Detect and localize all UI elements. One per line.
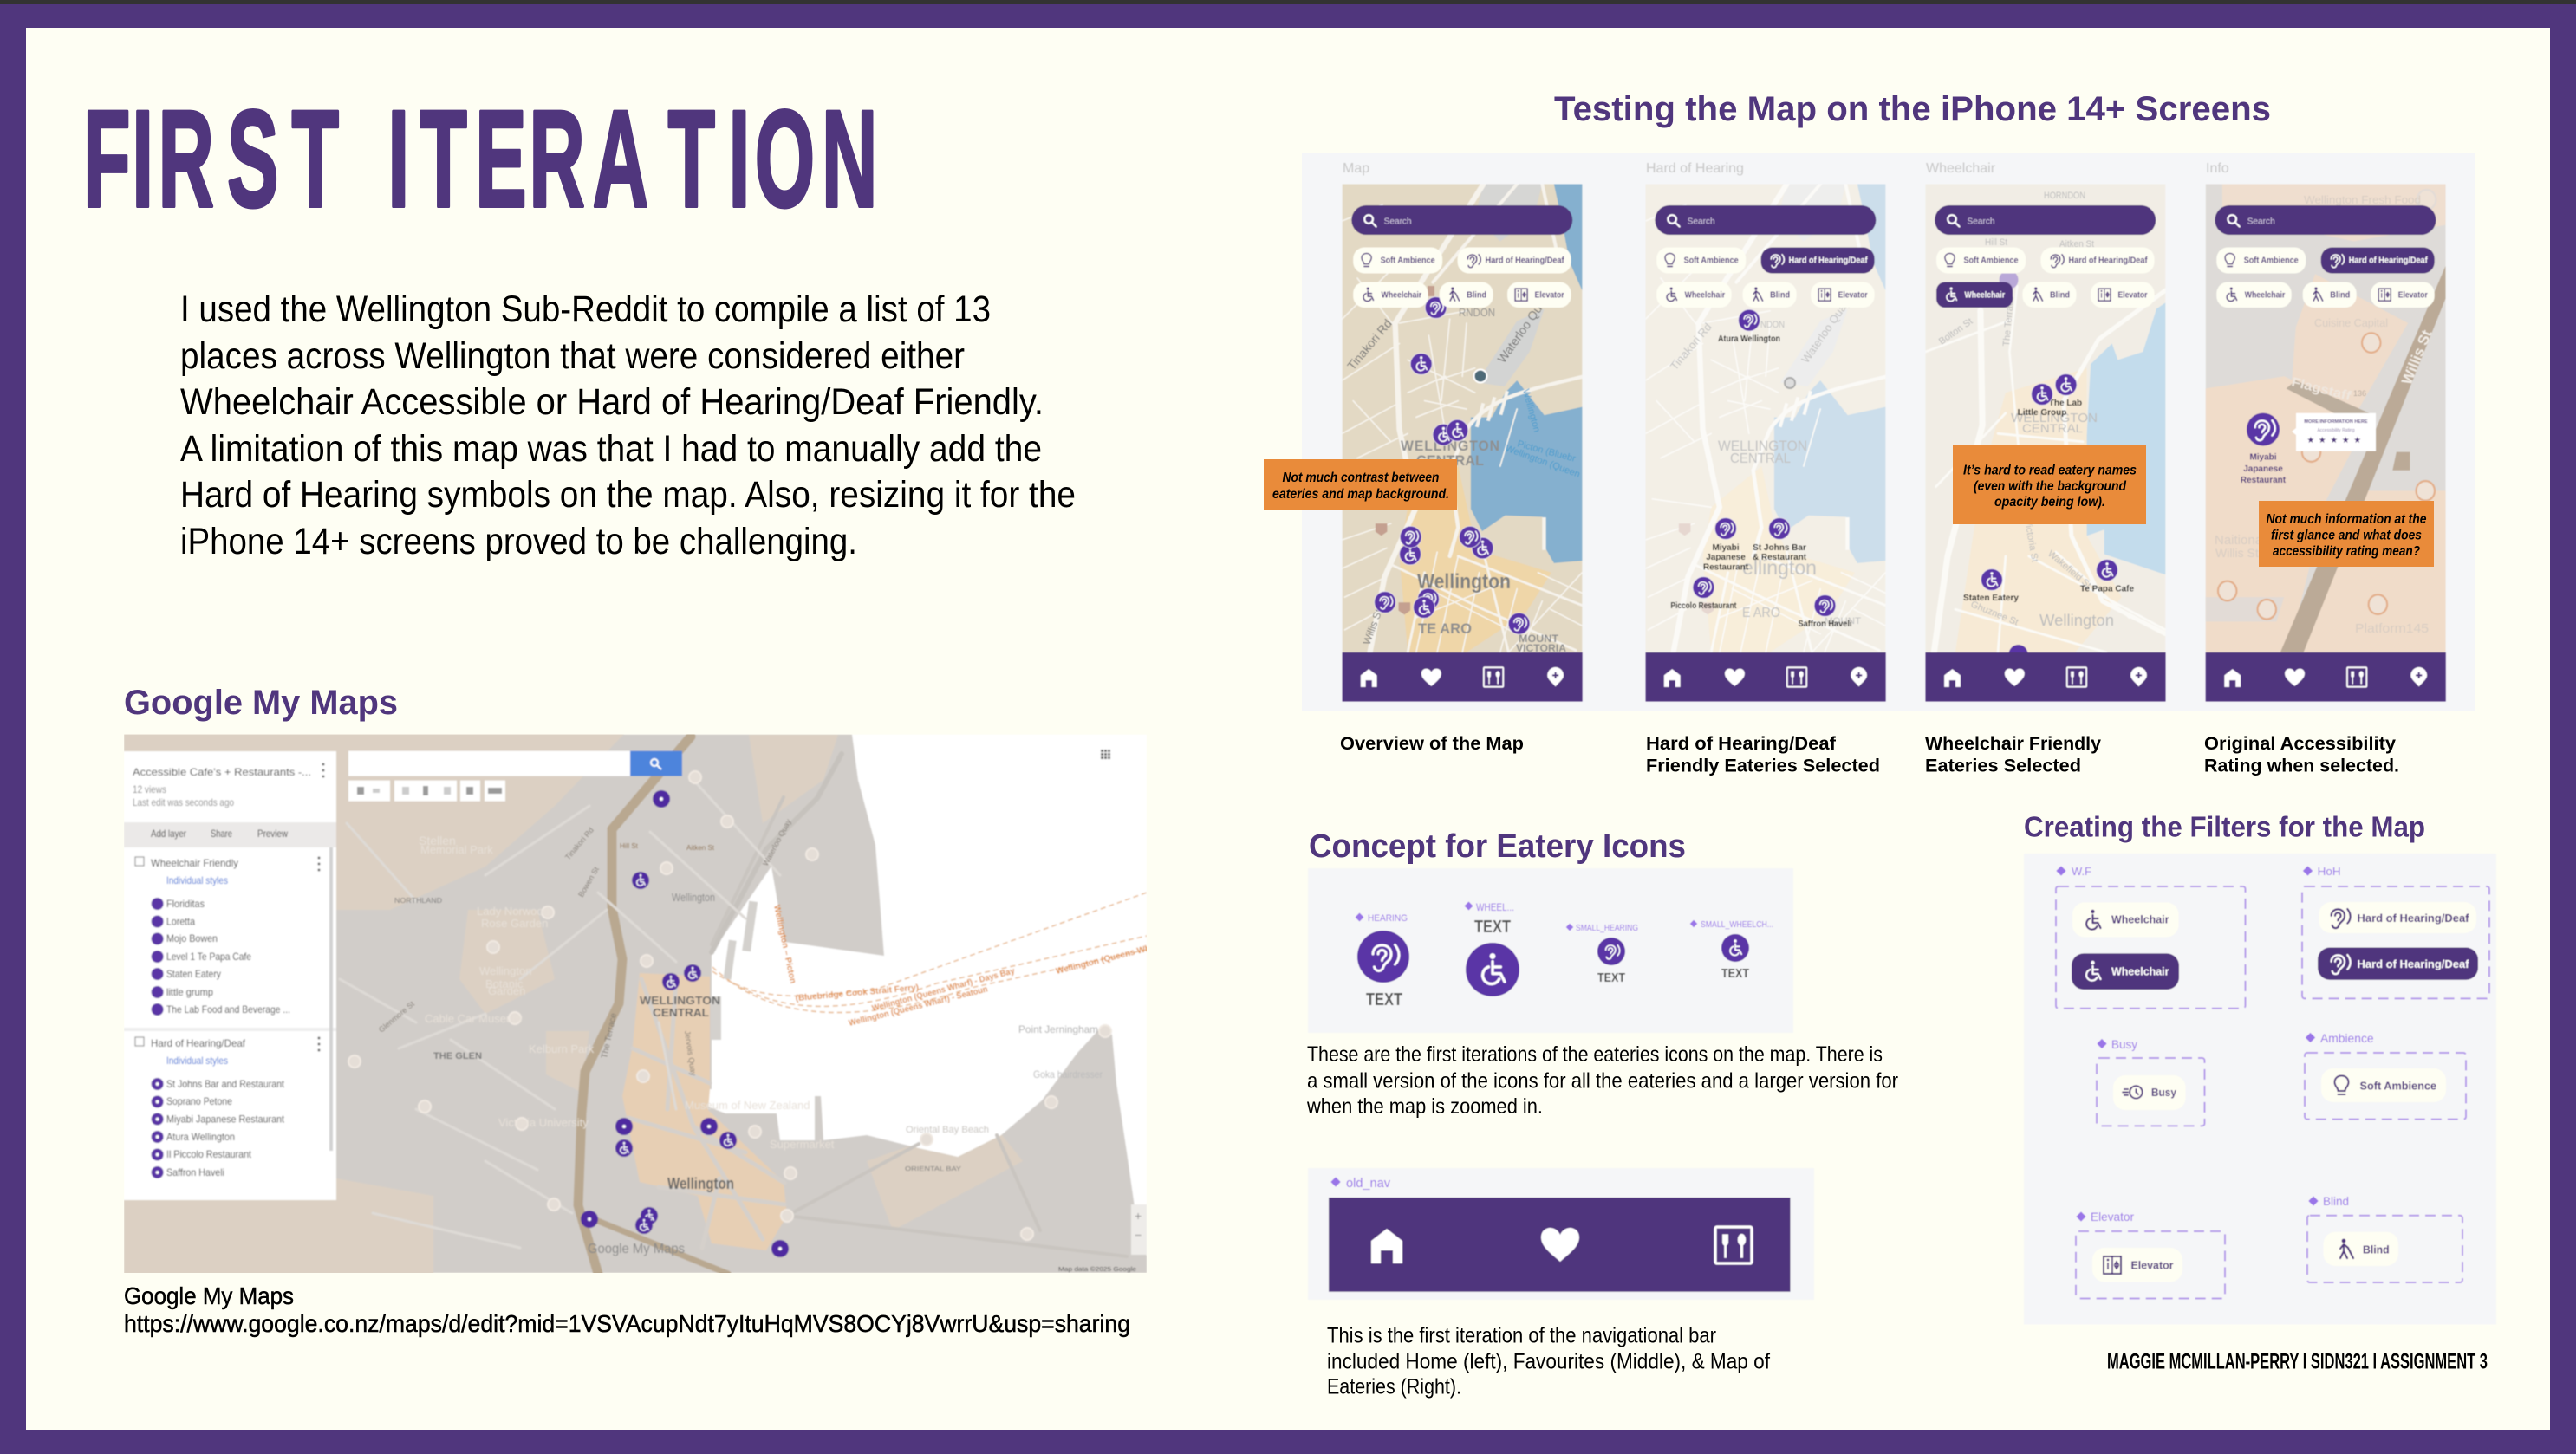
map labels: Wellington	[479, 964, 531, 977]
phone 3 map: Bolton St	[1937, 316, 1974, 347]
phone 4 map: Wellington Fresh Food	[2304, 193, 2421, 206]
navigation bar description: included Home (left), Favourites (Middle), & Map of	[1327, 1350, 1770, 1374]
phone 2 map: MOUNT	[1825, 616, 1861, 626]
panel: map filters	[2024, 854, 2496, 1324]
phone captions: Hard of Hearing/Deaf	[1646, 734, 1837, 754]
map layers sidebar: Soprano Petone	[166, 1095, 232, 1107]
map layers sidebar: Atura Wellington	[166, 1131, 235, 1143]
map caption and link	[124, 1282, 1130, 1337]
heading: Concept for Eatery Icons: Concept for Eatery Icons	[1309, 828, 1686, 865]
phone 2 map: WELLINGTON	[1718, 438, 1807, 454]
phone 4 map: Flagstaff	[2290, 374, 2353, 404]
accessibility rating card: MORE INFORMATION HERE	[2304, 419, 2368, 425]
phone 2 UI chrome: Blind	[1770, 291, 1790, 300]
phone 3 UI chrome: Blind	[2050, 291, 2070, 300]
phone 2 eatery pins and names: Saffron Haveli	[1798, 620, 1852, 629]
phone 4: original accessibility rating	[2206, 184, 2446, 702]
map layers sidebar: The Lab Food and Beverage ...	[166, 1003, 290, 1016]
map labels: Bowen St	[576, 865, 601, 899]
phone 1 map: WELLINGTON	[1401, 438, 1500, 454]
phone 2 UI chrome	[1646, 205, 1886, 702]
map labels: Wellington	[672, 891, 715, 904]
phone 1 map: Waterloo Quay	[1494, 291, 1552, 366]
phone 2 map	[1646, 184, 1888, 653]
callout: eatery names: opacity being low).	[1994, 495, 2105, 510]
filter: wheelchair	[2056, 865, 2245, 1009]
callout: contrast	[1264, 459, 1457, 510]
callout: eatery names: It’s hard to read eatery names	[1963, 463, 2137, 478]
map layers sidebar: Wheelchair Friendly	[151, 857, 238, 869]
phone 3 UI chrome: Soft Ambience	[1964, 256, 2019, 265]
filter: wheelchair: Wheelchair	[2111, 965, 2169, 977]
panel: eatery icons	[1308, 868, 1793, 1033]
phone 4 selected eatery: Japanese	[2243, 464, 2283, 474]
filter: wheelchair: Wheelchair	[2111, 913, 2169, 925]
panel: old navigation bar	[1308, 1168, 1814, 1300]
map grid menu	[1101, 750, 1110, 759]
map layers sidebar: Preview	[257, 828, 288, 840]
phone captions: Friendly Eateries Selected	[1646, 756, 1880, 776]
filter: ambience: Soft Ambience	[2359, 1080, 2436, 1092]
phone 4 map: Platform145	[2355, 621, 2429, 636]
phone 4 selected eatery	[2241, 413, 2287, 485]
map labels: ORIENTAL BAY	[905, 1166, 961, 1172]
icon: large hearing	[1356, 913, 1409, 1009]
filter: hard of hearing: Hard of Hearing/Deaf	[2358, 957, 2469, 970]
phone 2 UI chrome: Elevator	[1838, 291, 1868, 300]
phone 3: wheelchair selected	[1926, 184, 2165, 702]
filter: wheelchair: W.F	[2072, 865, 2091, 878]
map labels: Memorial Park	[420, 843, 493, 856]
phone 4 map: Naitional	[2215, 533, 2265, 548]
eatery icons description: These are the first iterations of the eateries icons on the map. There is	[1307, 1042, 1883, 1067]
phone 4 UI chrome: Soft Ambience	[2244, 256, 2299, 265]
map layers sidebar	[124, 751, 336, 1200]
map labels: Hill St	[620, 842, 639, 850]
phone 2 eatery pins and names	[1670, 309, 1852, 629]
phone frame labels	[1343, 161, 2229, 176]
eatery icons description: when the map is zoomed in.	[1306, 1094, 1543, 1119]
phone 4 UI chrome: Search	[2247, 217, 2275, 227]
phone 3 UI chrome: Elevator	[2118, 291, 2148, 300]
phone 2 eatery pins and names: Restaurant	[1703, 563, 1749, 572]
map labels: Google My Maps	[588, 1242, 685, 1256]
icon: large hearing: HEARING	[1368, 913, 1408, 924]
phone 4 selected eatery: Miyabi	[2249, 452, 2277, 463]
phone 1 map: Wellington	[1417, 570, 1511, 594]
phone 3 UI chrome: Wheelchair	[1964, 291, 2005, 300]
map search box and toolbar	[348, 751, 682, 802]
phone 1 UI chrome: Elevator	[1535, 291, 1564, 300]
phone 1: overview of the map	[1343, 184, 1584, 702]
phone 3 map: The Terrace	[2001, 295, 2016, 347]
phone 1 map: Willis St	[1361, 607, 1385, 646]
phone captions: Eateries Selected	[1925, 756, 2081, 776]
phone 2 map: Waterloo Quay	[1799, 296, 1852, 366]
phone 2 UI chrome: Soft Ambience	[1684, 256, 1739, 265]
intro paragraph	[180, 289, 1076, 562]
phone 2 eatery pins and names: Miyabi	[1712, 543, 1740, 553]
filter: elevator	[2076, 1210, 2225, 1298]
eatery icons description	[1306, 1042, 1898, 1119]
map layers sidebar: Accessible Cafe's + Restaurants -...	[133, 766, 311, 778]
phone 3 eatery pins and names: Te Papa Cafe	[2080, 584, 2134, 594]
phone 2 UI chrome: Wheelchair	[1685, 291, 1725, 300]
map caption and link: https://www.google.co.nz/maps/d/edit?mid=1VSVAcupNdt7yItuHqMVS8OCYj8VwrrU&usp=sharing	[124, 1310, 1130, 1337]
phone 4 map: Willis St	[2215, 546, 2259, 560]
phone 2 map: E ARO	[1742, 606, 1780, 620]
icon: small wheelchair: SMALL_WHEELCH...	[1701, 920, 1773, 930]
map labels: Stellen	[419, 834, 456, 847]
map labels: Oriental Bay Beach	[906, 1125, 989, 1135]
map labels: Museum of New Zealand	[685, 1099, 810, 1112]
icon: eateries	[1715, 1227, 1752, 1263]
heading: Testing the map: Testing the Map on the iPhone 14+ Screens	[1554, 90, 2271, 128]
phone 1 UI chrome: Search	[1384, 217, 1412, 227]
phone 1 map: VICTORIA	[1516, 642, 1566, 654]
filter: hard of hearing: HoH	[2318, 865, 2341, 878]
phone 2 UI chrome: Search	[1688, 217, 1715, 227]
map labels: Supermarket	[770, 1138, 835, 1151]
phone 2 eatery pins and names: St Johns Bar	[1753, 543, 1806, 553]
phone 3 UI chrome	[1926, 205, 2165, 702]
phone 3 eatery pins and names: Little Group	[2018, 408, 2066, 418]
icon: home	[1371, 1229, 1402, 1263]
map labels: Botanic	[485, 977, 524, 990]
callout: accessibility rating: Not much information at the	[2266, 512, 2427, 527]
phone 1 map: RNDON	[1459, 306, 1495, 319]
map labels: Jervois Quay	[683, 1030, 698, 1077]
phone 3 map: HORNDON	[2044, 191, 2085, 201]
phone frame labels: Map	[1343, 161, 1369, 176]
filter: elevator: Elevator	[2130, 1258, 2174, 1272]
map layers sidebar: Loretta	[166, 915, 195, 927]
map layers sidebar: Miyabi Japanese Restaurant	[166, 1113, 285, 1125]
map caption and link: Google My Maps	[124, 1282, 294, 1309]
phone 2 map: Tinakori Rd	[1668, 321, 1714, 373]
heading: Creating the Filters: Creating the Filters for the Map	[2024, 811, 2425, 842]
phone 1 map: Tinakori Rd	[1344, 316, 1395, 373]
map layers sidebar: Mojo Bowen	[166, 932, 218, 944]
phone 3 map: Wellington	[2039, 612, 2114, 629]
callout: eatery names: (even with the background	[1974, 479, 2127, 494]
phone 2 eatery pins and names: Atura Wellington	[1718, 334, 1780, 344]
phone 3 map: Hill St	[1985, 237, 2007, 248]
phone 3 eatery pins and names: The Lab	[2049, 399, 2082, 408]
phone 2 eatery pins and names: Japanese	[1706, 553, 1746, 562]
map labels: Victoria University	[498, 1116, 589, 1129]
icon: large hearing: TEXT	[1366, 990, 1402, 1009]
filter: hard of hearing: Hard of Hearing/Deaf	[2358, 912, 2469, 925]
phone 1 map: Wellington	[1520, 388, 1542, 433]
map labels: Rose Garden	[481, 917, 548, 930]
map layers sidebar: Il Piccolo Restaurant	[166, 1148, 252, 1160]
map markers	[581, 790, 789, 1257]
icon: large wheelchair	[1465, 901, 1519, 996]
map labels: Map data ©2025 Google	[1058, 1266, 1136, 1273]
map layers sidebar: Last edit was seconds ago	[133, 796, 234, 808]
phone 1 UI chrome: Wheelchair	[1382, 291, 1421, 300]
phone 4 UI chrome: Elevator	[2398, 291, 2428, 300]
map labels	[377, 817, 1136, 1273]
filter: busy: Busy	[2151, 1086, 2177, 1099]
top window strip	[0, 0, 2576, 4]
phone 1 UI chrome	[1343, 205, 1583, 702]
map labels: Wellington	[667, 1175, 734, 1192]
map labels: CENTRAL	[653, 1006, 709, 1019]
phone 4 UI chrome: Blind	[2330, 291, 2350, 300]
phone 4 UI chrome	[2206, 205, 2446, 702]
accessibility rating card: Accessibility Rating	[2317, 428, 2355, 433]
phone 3 map: Victoria St	[2022, 518, 2040, 563]
phone 1 UI chrome: Blind	[1467, 291, 1486, 300]
phone 2 eatery pins and names: Piccolo Restaurant	[1670, 601, 1737, 611]
filter: ambience	[2305, 1031, 2466, 1120]
filter: blind: Blind	[2323, 1194, 2349, 1208]
map layers sidebar: Staten Eatery	[166, 968, 221, 980]
icon: heart	[1541, 1228, 1579, 1262]
filter: busy	[2097, 1037, 2205, 1126]
icon: small wheelchair: TEXT	[1721, 966, 1749, 981]
filter: blind: Blind	[2363, 1243, 2390, 1256]
phone frame labels: Wheelchair	[1926, 161, 1996, 176]
map labels: Lady Norwood	[477, 905, 550, 918]
ferry route labels: Wellington – Picton	[771, 904, 797, 984]
ferry route labels: (Bluebridge Cook Strait Ferry)	[795, 983, 920, 1003]
map labels: The Terrace	[600, 1012, 619, 1060]
intro paragraph: iPhone 14+ screens proved to be challenging.	[180, 521, 857, 562]
map layers sidebar: 12 views	[133, 783, 166, 795]
phone 1 UI chrome: Soft Ambience	[1381, 256, 1435, 265]
phone 3 eatery pins and names: Staten Eatery	[1963, 594, 2019, 603]
phone 1 UI chrome: Hard of Hearing/Deaf	[1486, 256, 1564, 265]
filter: elevator: Elevator	[2091, 1210, 2134, 1224]
map labels: Point Jerningham	[1018, 1023, 1098, 1035]
map layers sidebar: little grump	[166, 986, 213, 998]
map layers sidebar: Individual styles	[166, 874, 228, 886]
ferry route labels	[771, 904, 1165, 1029]
phone 3 map: CENTRAL	[2022, 421, 2083, 435]
filter: hard of hearing	[2302, 865, 2489, 998]
map layers sidebar: Level 1 Te Papa Cafe	[166, 951, 251, 963]
phone 2 map: CENTRAL	[1730, 451, 1791, 466]
map layers sidebar: Individual styles	[166, 1055, 228, 1067]
phone captions: Wheelchair Friendly	[1925, 734, 2101, 754]
phone 3 UI chrome: Hard of Hearing/Deaf	[2068, 256, 2148, 265]
accessibility rating card	[2292, 413, 2376, 451]
map labels: Goka hairdresser	[1033, 1068, 1103, 1081]
navigation bar description: This is the first iteration of the navigational bar	[1327, 1324, 1716, 1348]
filter: ambience: Ambience	[2320, 1031, 2374, 1045]
panel: phone screens background	[1302, 153, 2475, 711]
phone 1 map: TE ARO	[1418, 620, 1472, 637]
map layers sidebar: Hard of Hearing/Deaf	[151, 1037, 246, 1049]
phone captions: Overview of the Map	[1340, 734, 1524, 754]
phone 3 map: Wakefield St	[2046, 548, 2093, 591]
callout: contrast: eateries and map background.	[1272, 487, 1449, 502]
intro paragraph: Hard of Hearing symbols on the map. Also, resizing it for the	[180, 474, 1076, 516]
navigation bar description: Eateries (Right).	[1327, 1374, 1461, 1399]
filter: blind	[2307, 1194, 2462, 1282]
accessibility rating card: ★★★★★	[2306, 436, 2365, 445]
map zoom controls	[1131, 1204, 1147, 1255]
map labels: NORTHLAND	[394, 897, 442, 905]
icon: small hearing: TEXT	[1597, 970, 1625, 985]
phone 2 map: NDON	[1760, 320, 1785, 330]
icon: small wheelchair	[1690, 920, 1773, 981]
phone 3 map: Aitken St	[2059, 239, 2094, 250]
map labels: Waterloo Quay	[761, 817, 793, 867]
phone 2 UI chrome: Hard of Hearing/Deaf	[1789, 256, 1868, 265]
phone 3 eatery pins and names	[1963, 374, 2134, 603]
callout: accessibility rating: accessibility rating mean?	[2273, 544, 2420, 559]
ferry route labels: Wellington (Queens Wharf) - Days Bay	[871, 966, 1016, 1014]
title: FIRST ITERATION	[83, 82, 877, 237]
phone 2 eatery pins and names: & Restaurant	[1753, 553, 1807, 562]
map labels: THE GLEN	[433, 1051, 482, 1061]
callout: accessibility rating: first glance and what does	[2271, 529, 2422, 542]
intro paragraph: I used the Wellington Sub-Reddit to compile a list of 13	[180, 289, 991, 330]
heading: Google My Maps: Google My Maps	[124, 684, 398, 722]
phone 4 UI chrome: Wheelchair	[2245, 291, 2285, 300]
map layers sidebar: St Johns Bar and Restaurant	[166, 1078, 285, 1090]
phone 2: hard of hearing selected	[1646, 184, 1888, 702]
map layers sidebar: Share	[211, 828, 232, 840]
phone 3 UI chrome: Search	[1968, 217, 1995, 227]
phone captions	[1340, 734, 2399, 776]
phone 1 map: MOUNT	[1519, 633, 1559, 645]
panel: old navigation bar: old_nav	[1346, 1176, 1390, 1191]
phone captions: Original Accessibility	[2204, 734, 2396, 754]
callout: contrast: Not much contrast between	[1283, 471, 1440, 485]
map land and sea	[124, 734, 1147, 1274]
map labels: WELLINGTON	[640, 994, 720, 1007]
phone 2 map: ellington	[1742, 556, 1817, 579]
map labels: Kelburn Park	[529, 1042, 595, 1055]
filter: busy: Busy	[2111, 1037, 2137, 1051]
panel: Google My Maps screenshot	[124, 734, 1165, 1274]
callout: eatery names	[1953, 445, 2146, 524]
icon: large wheelchair: WHEEL...	[1476, 901, 1514, 913]
map labels: Aitken St	[686, 844, 715, 852]
eatery icons description: a small version of the icons for all the eateries and a larger version for	[1307, 1069, 1898, 1094]
intro paragraph: places across Wellington that were considered either	[180, 335, 965, 377]
phone 1 map	[1343, 184, 1584, 654]
phone 3 map	[1926, 184, 2165, 664]
phone 4 UI chrome: Hard of Hearing/Deaf	[2349, 256, 2428, 265]
ferry route labels: Wellington (Queens Wharf) - Seatoun	[848, 984, 989, 1029]
intro paragraph: Wheelchair Accessible or Hard of Hearing/Deaf Friendly.	[180, 381, 1044, 423]
phone 1 map: Wellington (Queen	[1504, 444, 1582, 480]
icon: small hearing	[1566, 924, 1638, 985]
map layers sidebar: Floriditas	[166, 898, 205, 910]
map labels: Glenmore St	[377, 999, 416, 1035]
navigation bar description	[1327, 1324, 1770, 1399]
map labels: Cable Car Museum	[425, 1012, 522, 1025]
map zoom controls: +	[1135, 1209, 1142, 1223]
map labels: Tinakori Rd	[563, 826, 595, 861]
icon: small hearing: SMALL_HEARING	[1576, 924, 1638, 933]
phone 4 map: Willis St	[2398, 328, 2436, 386]
icon: large wheelchair: TEXT	[1474, 918, 1511, 937]
phone captions: Rating when selected.	[2204, 756, 2399, 776]
map zoom controls: −	[1135, 1228, 1142, 1242]
phone 4 map: Cuisine Capital	[2314, 316, 2388, 329]
map layers sidebar: Add layer	[151, 828, 186, 840]
phone frame labels: Hard of Hearing	[1646, 161, 1744, 176]
phone 3 map: Ghuznee St	[1969, 600, 2020, 628]
callout: accessibility rating	[2259, 501, 2434, 567]
phone 4 map: 136	[2353, 389, 2366, 398]
phone 1 map: Picton (Bluebr	[1516, 438, 1577, 464]
ferry route labels: Wellington (Queens Wharf)	[1055, 940, 1165, 977]
phone 4 map	[2206, 184, 2445, 652]
phone 1 map: CENTRAL	[1416, 452, 1484, 469]
map labels: Garden	[488, 984, 525, 997]
intro paragraph: A limitation of this map was that I had to manually add the	[180, 428, 1042, 470]
phone frame labels: Info	[2206, 161, 2229, 176]
phone 4 selected eatery: Restaurant	[2241, 476, 2287, 485]
map layers sidebar: Saffron Haveli	[166, 1166, 224, 1178]
phone 3 map: WELLINGTON	[2011, 411, 2098, 425]
